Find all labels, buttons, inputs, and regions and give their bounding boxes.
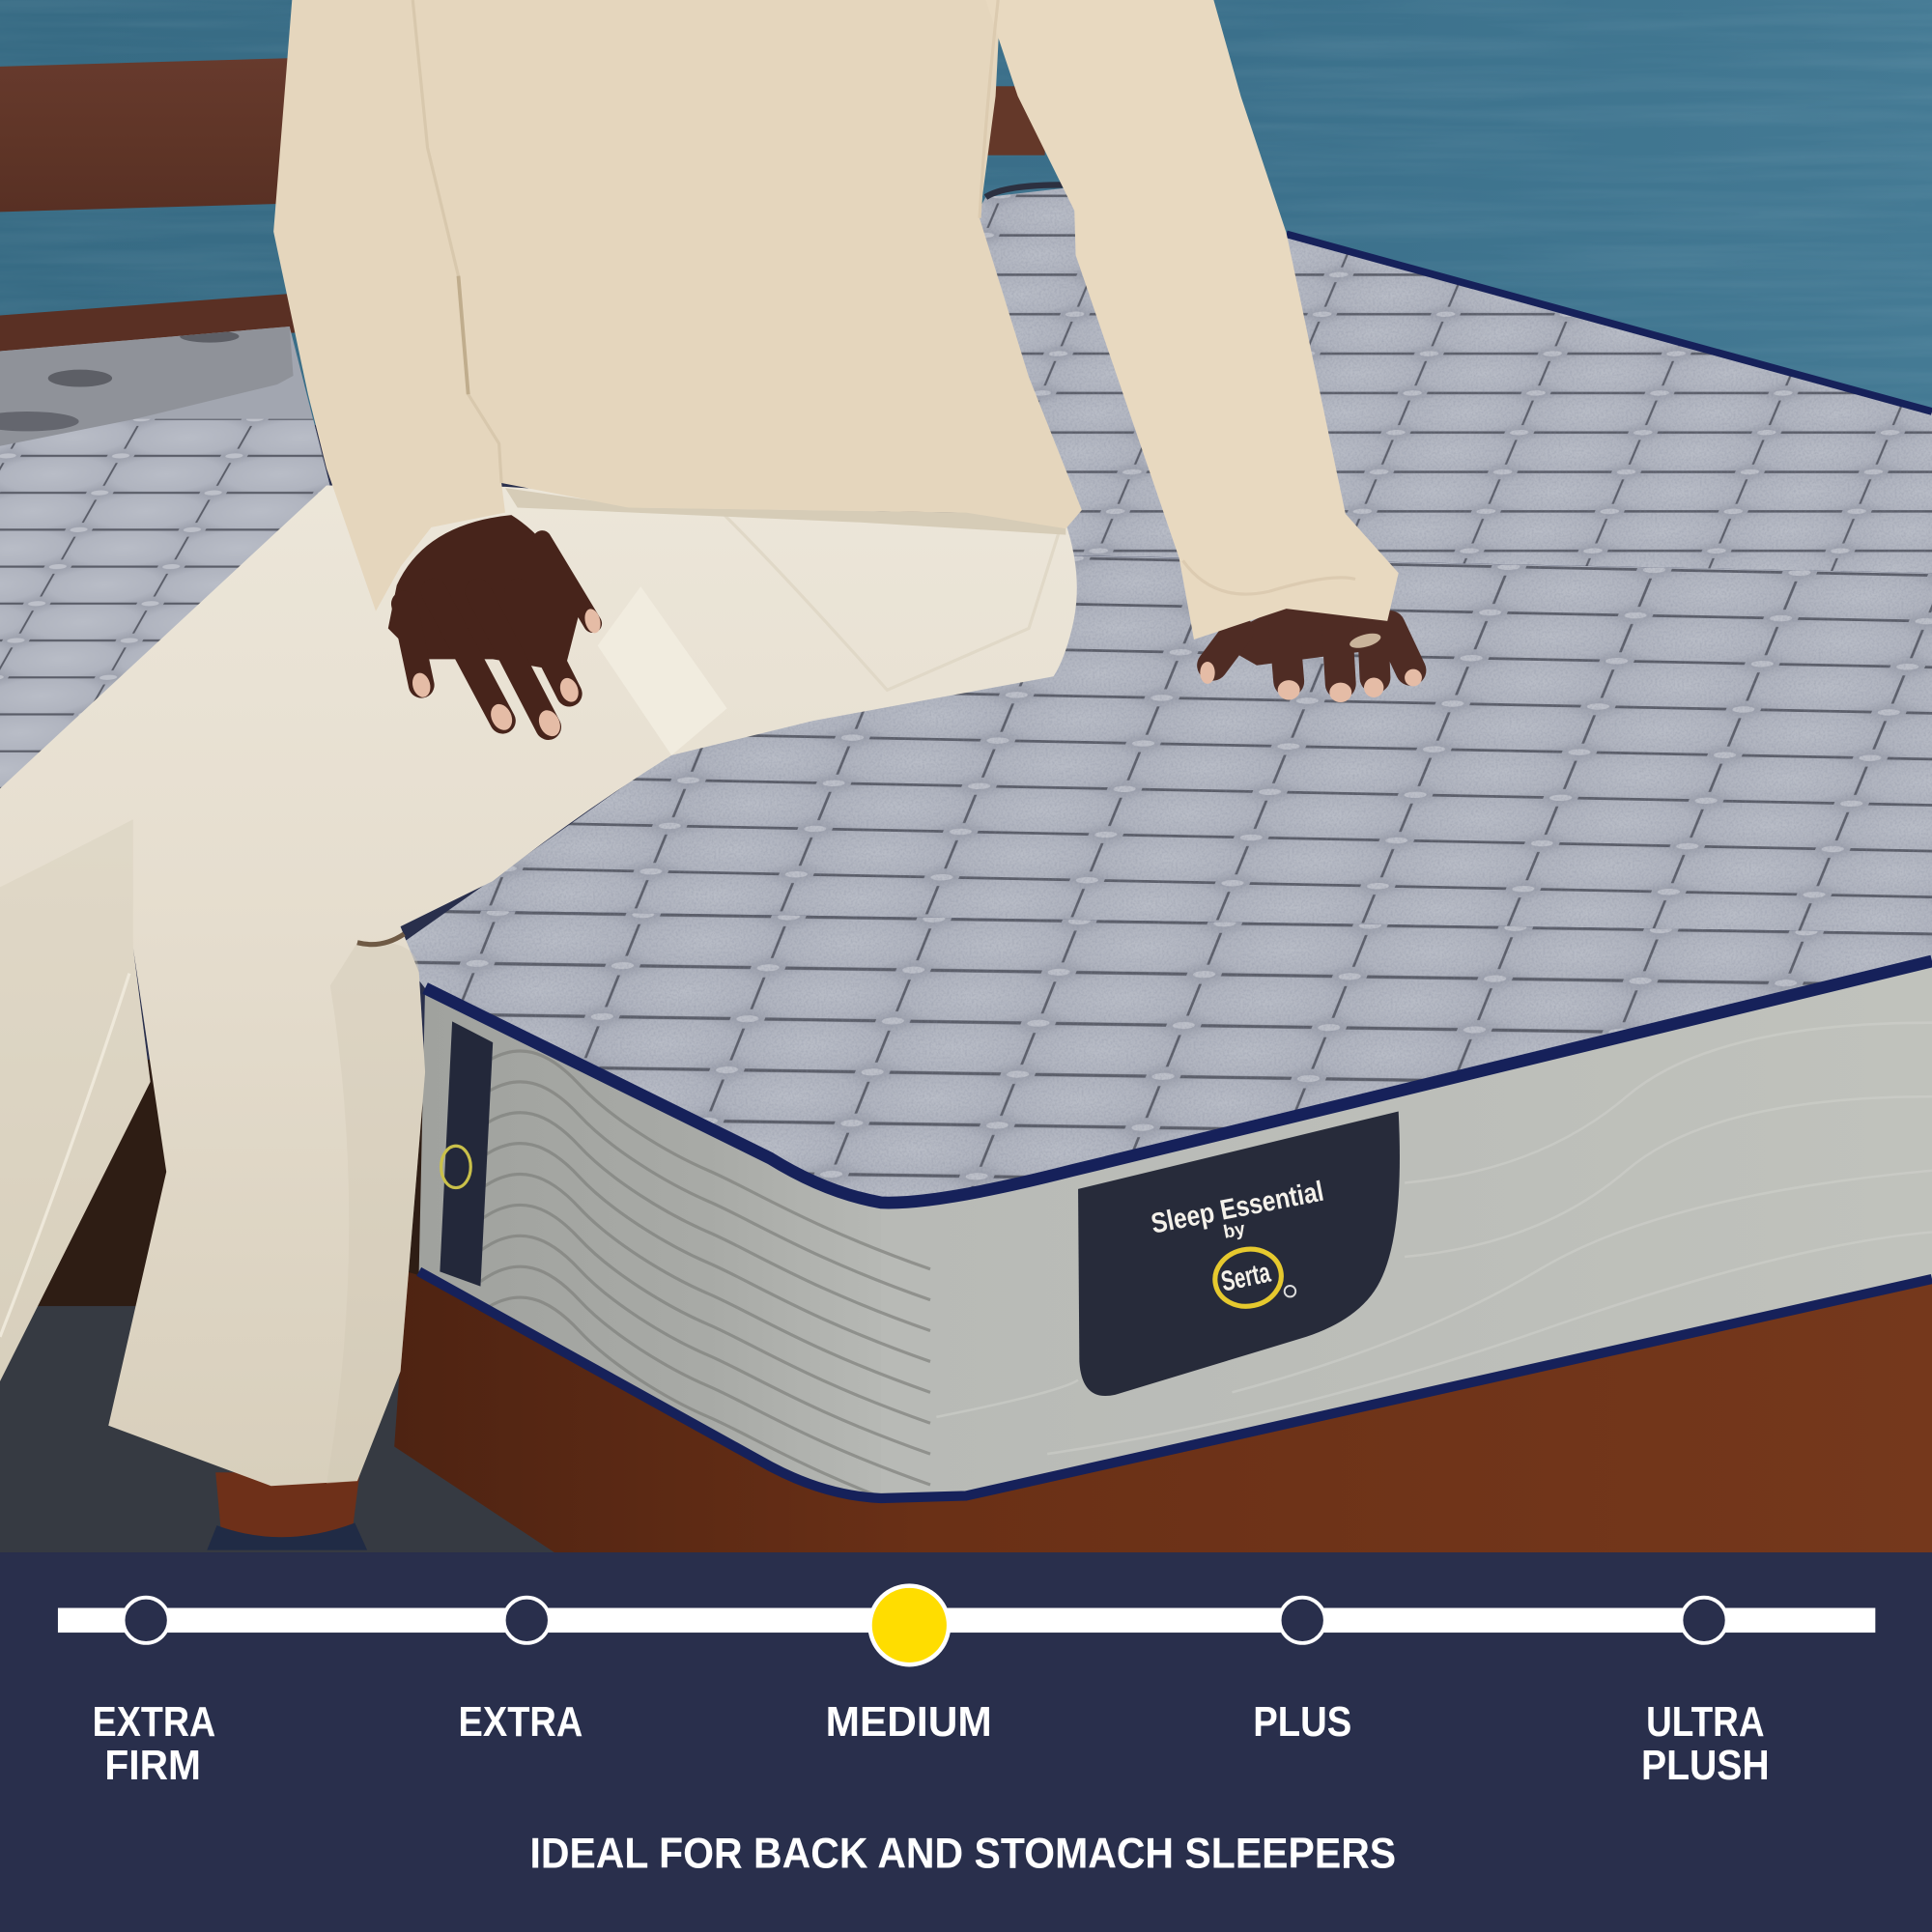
mattress: side panels [419,963,1932,1516]
label: extra firm: EXTRA [93,1699,215,1746]
marker: plus [1280,1598,1325,1643]
label: plus: PLUS [1253,1699,1351,1746]
label: medium: MEDIUM [826,1699,992,1746]
person: left hand on thigh [388,515,603,740]
scale bar [58,1608,1875,1633]
base: wooden platform [394,1271,1932,1552]
label: ultra plush: PLUSH [1641,1743,1770,1789]
headboard: wood rails [0,58,1045,352]
tag: Sleep Essential by Serta: Serta [1218,1257,1273,1298]
marker: ultra plush [1681,1598,1727,1643]
mattress: navy piping [419,185,1932,1498]
person: right hand on mattress [1200,604,1422,702]
panel: firmness scale [0,1552,1932,1932]
marker: extra firm [124,1598,169,1643]
label: extra: EXTRA [458,1699,582,1746]
label: ultra plush [1641,1699,1770,1789]
tag: Sleep Essential by Serta [1078,1112,1400,1396]
tag: Sleep Essential by Serta: by [1222,1219,1247,1243]
marker: extra [504,1598,550,1643]
side mattress: left neighbour [0,327,345,801]
floor [0,1060,1932,1552]
caption: sleeper recommendation: IDEAL FOR BACK AND STOMACH SLEEPERS [529,1831,1396,1878]
strap: side Serta label [440,1021,493,1287]
label: ultra plush: ULTRA [1646,1699,1765,1746]
person: sweater [273,0,1399,639]
person: stool leg and shoe [207,1472,367,1550]
label: extra firm: FIRM [104,1743,201,1789]
person: trousers [0,486,1077,1486]
wall: blue water backdrop [0,0,1932,425]
label: extra firm [93,1699,215,1789]
tag: Sleep Essential by Serta: Sleep Essential [1149,1176,1326,1240]
marker: medium (active) [870,1586,949,1664]
mattress: quilted top [394,173,1932,1220]
